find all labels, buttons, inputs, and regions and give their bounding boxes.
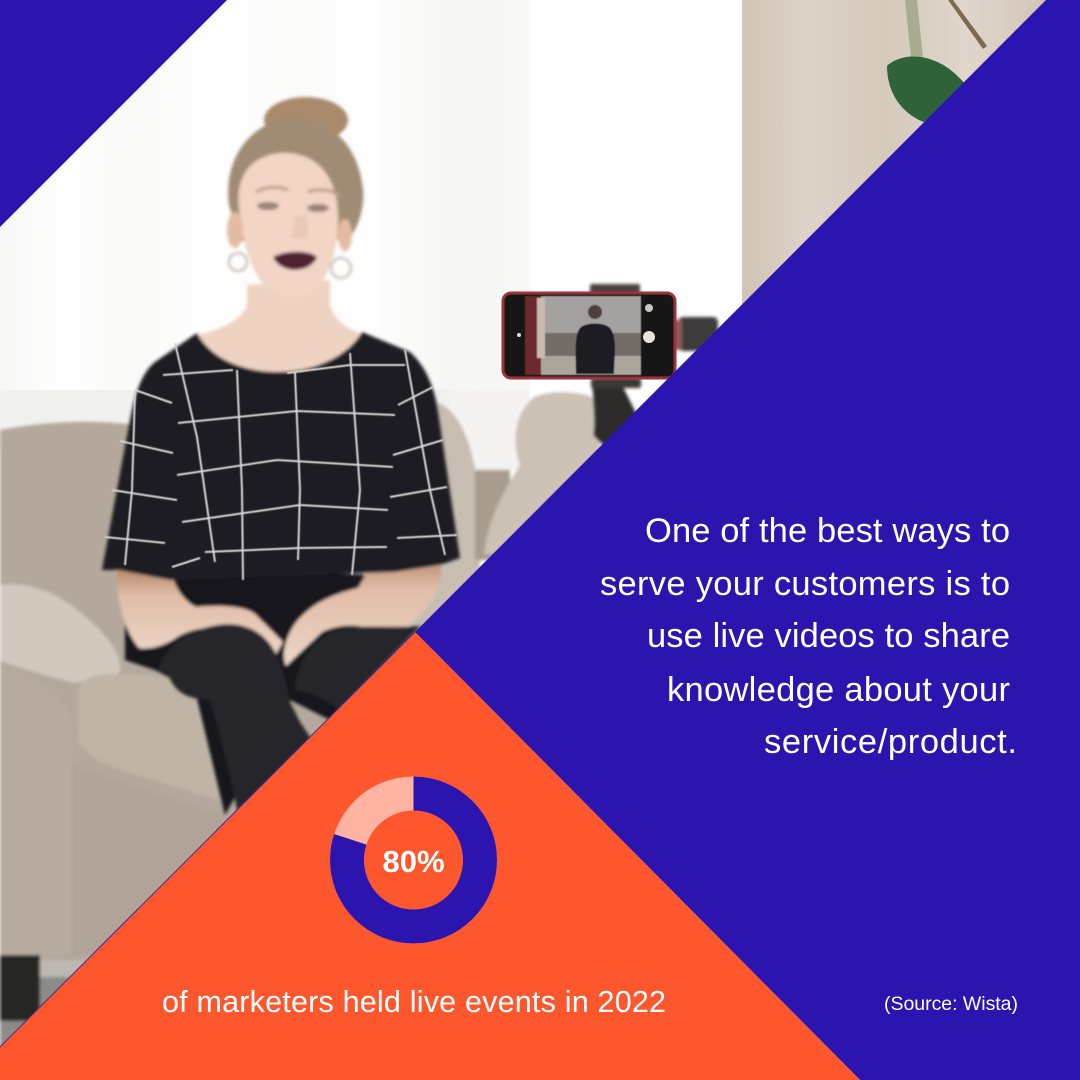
panel: orange statistic triangle — [0, 632, 860, 1080]
caption: marketers statistic: of marketers held live events in 2022 — [162, 985, 666, 1019]
shirt grid lines — [105, 343, 457, 580]
woman — [102, 97, 460, 824]
text block: live video advice: One of the best ways to — [645, 512, 1010, 550]
face and neck — [197, 280, 362, 390]
source note: (Source: Wista) — [884, 993, 1018, 1015]
under-shirt lap — [125, 570, 410, 815]
text block: live video advice: service/product. — [764, 723, 1017, 761]
donut value: 80% — [382, 844, 445, 879]
text block: live video advice — [600, 512, 1017, 761]
text block: live video advice: knowledge about your — [667, 671, 1010, 709]
shirt — [102, 332, 460, 580]
sofa — [0, 392, 600, 1080]
legs — [157, 624, 312, 824]
hair — [264, 97, 348, 143]
text block: live video advice: use live videos to share — [647, 617, 1010, 655]
panel: top-left blue corner — [0, 0, 227, 227]
text block: live video advice: serve your customers is to — [600, 565, 1010, 603]
phone on gimbal — [503, 284, 718, 455]
arms — [117, 570, 283, 656]
panel: right blue area — [415, 0, 1080, 1080]
donut chart: 80% — [347, 794, 480, 926]
